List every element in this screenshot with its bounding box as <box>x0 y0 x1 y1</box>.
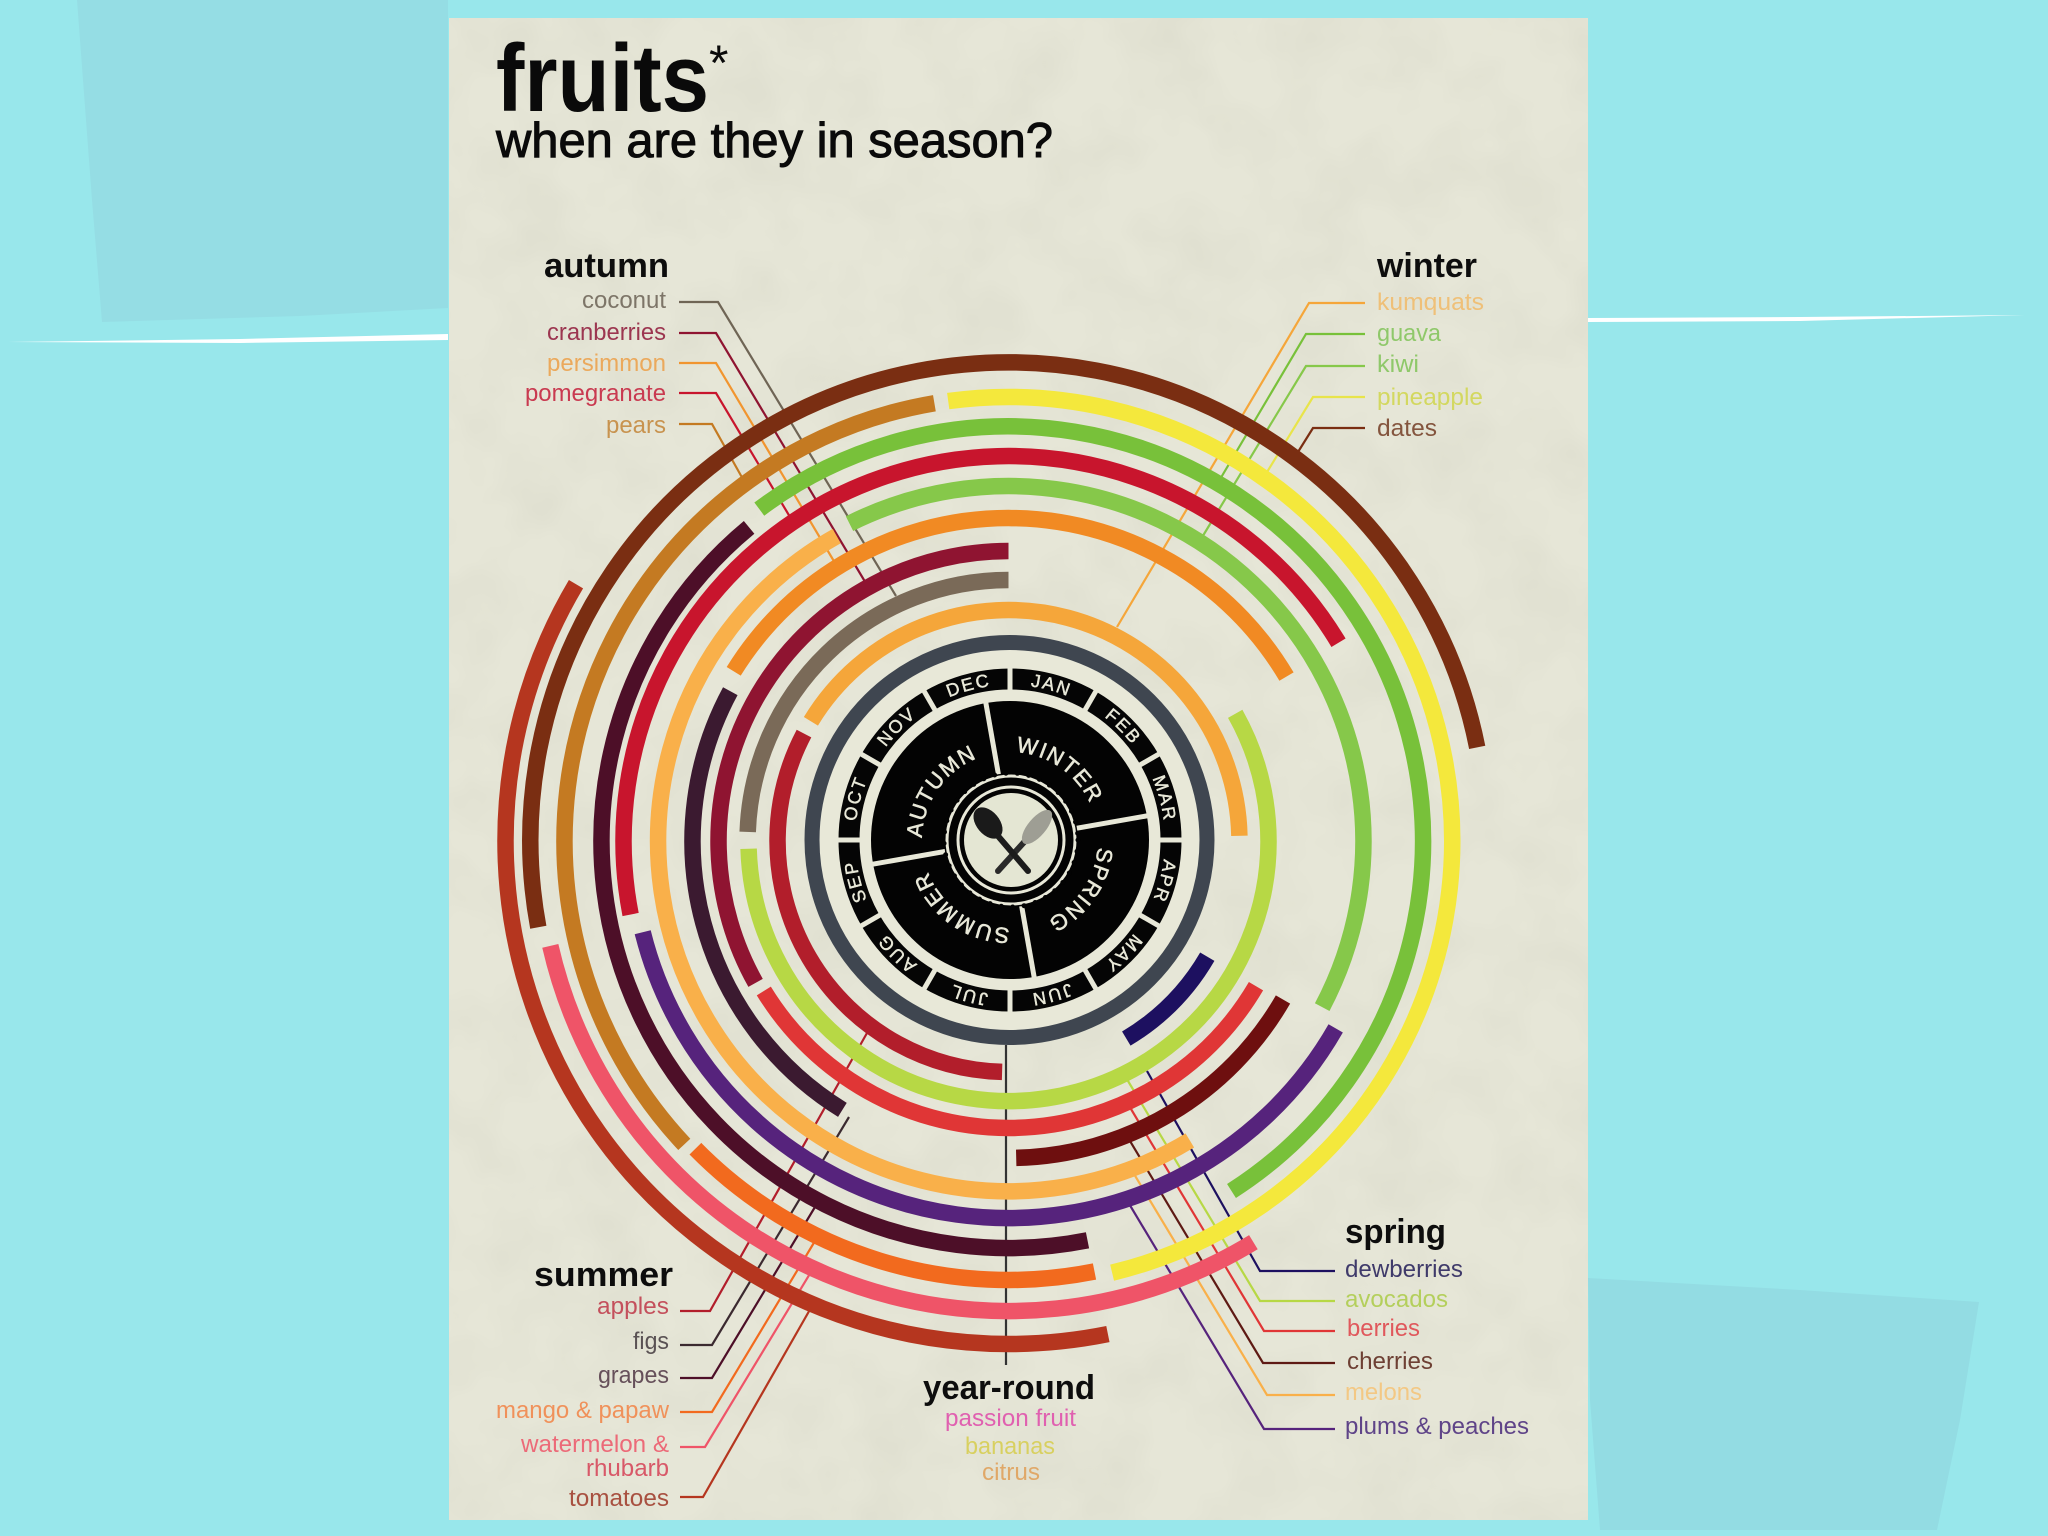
gray outer ring <box>812 642 1207 1038</box>
label: citrus: citrus <box>982 1459 1040 1486</box>
label: dewberries: dewberries <box>1345 1256 1463 1283</box>
white streak: left <box>8 334 448 343</box>
leader: year-round <box>1005 1045 1007 1365</box>
season labels: AUTUMN <box>907 745 976 838</box>
label: pears: pears <box>606 412 666 439</box>
heading: spring: spring <box>1345 1213 1446 1251</box>
icon: whisk <box>998 805 1057 871</box>
month labels: JUN <box>1033 984 1071 1006</box>
label: guava: guava <box>1377 320 1442 347</box>
ring: tomatoes <box>505 584 1108 1344</box>
leader: pineapple <box>1264 397 1365 477</box>
month labels: MAR <box>1152 774 1176 820</box>
leader: coconut <box>679 302 896 596</box>
ring: persimmon <box>734 518 1286 677</box>
season disc <box>871 701 1149 979</box>
ring: pears <box>564 403 934 1144</box>
label: dates: dates <box>1377 415 1437 442</box>
ring: plums and peaches <box>643 932 1336 1218</box>
month band <box>838 668 1182 1012</box>
leader: watermelon and rhubarb <box>680 1267 814 1447</box>
season labels <box>907 736 1112 944</box>
label: watermelon and rhubarb: watermelon & <box>520 1431 669 1458</box>
ring: dates <box>530 362 1477 927</box>
leader: grapes <box>680 1202 818 1378</box>
label: kiwi: kiwi <box>1377 351 1419 378</box>
month labels: MAY <box>1108 934 1143 972</box>
month labels: APR <box>1154 858 1176 901</box>
month labels <box>844 674 1176 1006</box>
label: avocados: avocados <box>1345 1286 1448 1313</box>
autumn legend <box>525 247 669 439</box>
ring: grapes <box>601 527 1088 1248</box>
label: melons: melons <box>1345 1379 1422 1406</box>
month labels: JAN <box>1031 674 1070 696</box>
heading: summer: summer <box>534 1256 673 1294</box>
year-round legend <box>923 1369 1095 1486</box>
leader: persimmon <box>679 363 838 568</box>
title: fruits <box>496 25 709 132</box>
icon: spoon <box>968 802 1028 871</box>
title: * <box>709 35 728 91</box>
ring: dewberries <box>1126 957 1207 1039</box>
leader: cranberries <box>679 333 867 585</box>
background patch: bottom right <box>1588 1278 1979 1530</box>
leader: apples <box>680 1033 867 1311</box>
background patch: top left <box>77 0 448 322</box>
leader: plums and peaches <box>1128 1202 1335 1429</box>
leader: cherries <box>1127 1136 1335 1363</box>
label: pomegranate: pomegranate <box>525 380 666 407</box>
ring: pomegranate <box>624 456 1338 914</box>
month labels: DEC <box>946 674 988 697</box>
ring: berries <box>764 986 1256 1128</box>
month labels: SEP <box>844 864 866 902</box>
leader: berries <box>1128 1104 1335 1331</box>
label: tomatoes: tomatoes <box>569 1485 669 1512</box>
leader: mango and papaw <box>680 1236 818 1412</box>
heading: year-round: year-round <box>923 1369 1095 1407</box>
label: mango and papaw: mango & papaw <box>496 1397 670 1424</box>
ring: cranberries <box>719 551 1008 983</box>
ring: pineapple <box>948 397 1452 1273</box>
leader: kiwi <box>1201 366 1365 539</box>
leader: figs <box>680 1117 849 1345</box>
month labels: JUL <box>954 984 988 1006</box>
label: watermelon and rhubarb <box>520 1431 669 1482</box>
label: bananas: bananas <box>965 1433 1055 1460</box>
month labels: FEB <box>1105 708 1140 742</box>
subtitle: when are they in season? <box>495 114 1053 168</box>
ring: mango and papaw <box>695 1149 1094 1280</box>
heading: autumn: autumn <box>544 247 669 285</box>
label: cranberries: cranberries <box>547 319 666 346</box>
seasonal rings <box>505 362 1477 1344</box>
label: berries: berries <box>1347 1315 1420 1342</box>
ring: figs <box>692 691 842 1110</box>
label: apples: apples <box>597 1293 669 1320</box>
spring legend <box>1345 1213 1529 1440</box>
leader: avocados <box>1125 1076 1335 1301</box>
leader: melons <box>1131 1169 1335 1395</box>
ring: avocados <box>749 714 1268 1101</box>
label: coconut: coconut <box>582 287 666 314</box>
label: watermelon and rhubarb: rhubarb <box>586 1455 669 1482</box>
leader: kumquats <box>1117 303 1365 627</box>
leader: dewberries <box>1147 1071 1335 1271</box>
label: pineapple: pineapple <box>1377 384 1483 411</box>
central season wheel <box>804 635 1214 1045</box>
ring: guava <box>759 426 1423 1191</box>
hub badge <box>944 773 1078 907</box>
label: passion fruit: passion fruit <box>945 1405 1076 1432</box>
heading: winter: winter <box>1376 247 1477 285</box>
label: plums and peaches: plums & peaches <box>1345 1413 1529 1440</box>
label: kumquats: kumquats <box>1377 289 1484 316</box>
white streak: right <box>1588 315 2025 322</box>
label: grapes: grapes <box>598 1362 669 1389</box>
ring: kumquats <box>811 610 1239 836</box>
leader lines <box>679 302 1365 1497</box>
leader: pears <box>679 424 744 481</box>
leader: dates <box>1293 428 1365 460</box>
summer legend <box>496 1256 673 1512</box>
leader: guava <box>1219 334 1365 481</box>
season labels: SPRING <box>1050 848 1112 930</box>
month labels: OCT <box>844 776 866 820</box>
ring: melons <box>658 536 1190 1191</box>
leader: pomegranate <box>679 393 793 522</box>
season labels: WINTER <box>1018 736 1102 803</box>
month labels: NOV <box>876 706 912 746</box>
month labels: AUG <box>880 936 918 972</box>
ring: cherries <box>1016 1000 1283 1158</box>
ring: coconut <box>748 580 1008 832</box>
ring: kiwi <box>850 486 1363 1007</box>
winter legend <box>1376 247 1484 442</box>
label: cherries: cherries <box>1347 1348 1433 1375</box>
ring: apples <box>778 734 1002 1072</box>
label: persimmon: persimmon <box>547 350 666 377</box>
leader: tomatoes <box>680 1306 812 1497</box>
paper poster <box>449 18 1588 1520</box>
ring: watermelon and rhubarb <box>550 946 1253 1311</box>
label: figs: figs <box>633 1328 669 1355</box>
season labels: SUMMER <box>916 872 1009 944</box>
